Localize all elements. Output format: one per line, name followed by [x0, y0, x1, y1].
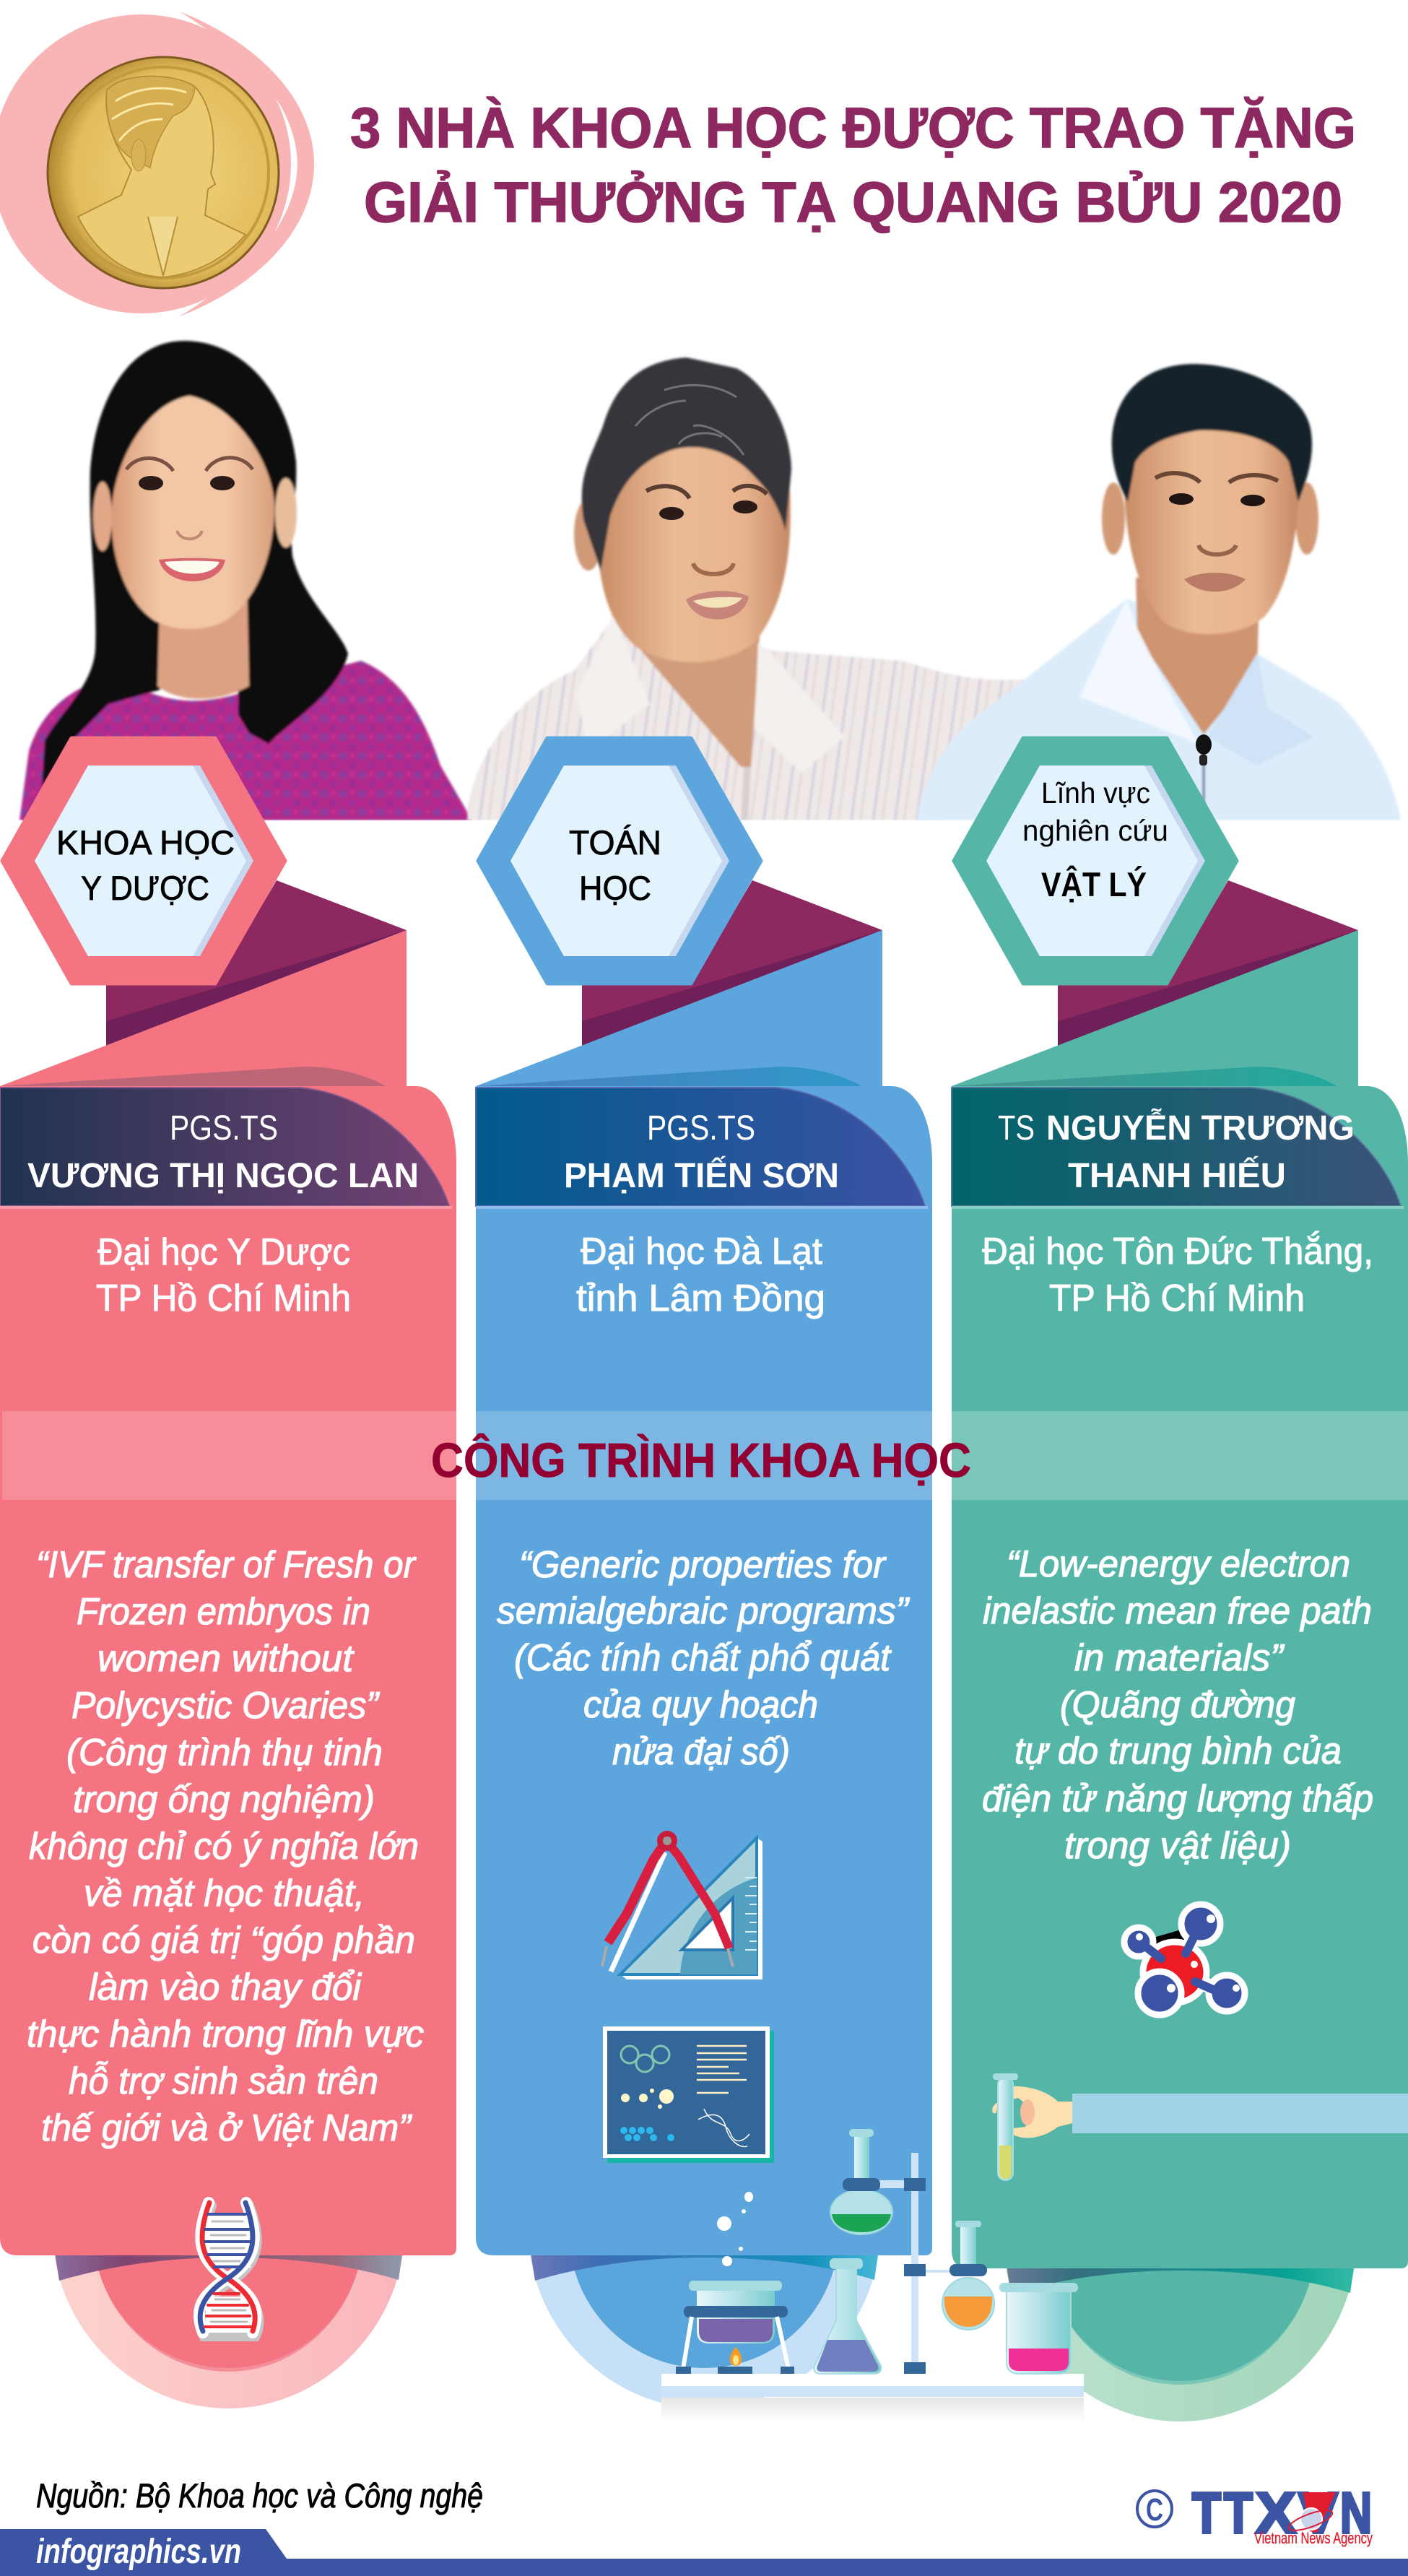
panel: Vật lý: THANH HIẾU [1068, 1156, 1286, 1195]
green flask [830, 2129, 892, 2234]
award medal [0, 12, 314, 316]
title: 3 NHÀ KHOA HỌC ĐƯỢC TRAO TẶNG [350, 95, 1356, 160]
pink beaker [999, 2283, 1078, 2374]
panel: Vật lý [952, 880, 1408, 2268]
burner beaker [676, 2281, 794, 2374]
research description [27, 1544, 424, 2149]
university: tỉnh Lâm Đồng [576, 1278, 825, 1319]
hexagon: Toán học: TOÁN [569, 823, 661, 862]
TTXVN logo: T [1224, 2481, 1253, 2545]
icon: hand holding test tube [992, 2073, 1408, 2180]
hexagon: Khoa học Y dược: Y DƯỢC [81, 869, 209, 907]
icon: microphone [1196, 734, 1212, 766]
conical flask [814, 2258, 881, 2374]
TTXVN logo [1137, 2481, 1373, 2547]
research description [982, 1543, 1373, 1867]
hexagon: Khoa học Y dược [2, 738, 285, 984]
research description: không chỉ có ý nghĩa lớn [29, 1826, 419, 1868]
research description [497, 1544, 911, 1773]
retort stand [879, 2153, 951, 2374]
lower semi-circles [53, 2239, 1356, 2421]
semi-circle: pink [53, 2239, 404, 2408]
bench [661, 2398, 1084, 2422]
TTXVN logo: C [1146, 2492, 1163, 2528]
university: TP Hồ Chí Minh [96, 1278, 351, 1319]
university: TP Hồ Chí Minh [1049, 1278, 1305, 1319]
research description: hỗ trợ sinh sản trên [69, 2060, 378, 2102]
research description: trong vật liệu) [1064, 1825, 1291, 1867]
research description: Polycystic Ovaries” [71, 1685, 381, 1727]
research description: (Các tính chất phổ quát [514, 1637, 892, 1679]
name band [952, 1088, 1401, 1206]
icon: molecule [1124, 1904, 1245, 2015]
panel: Vật lý: TS [998, 1109, 1035, 1148]
semi-circle: green [1004, 2252, 1356, 2421]
panel: Vật lý: NGUYỄN TRƯƠNG [1046, 1109, 1355, 1148]
research description: còn có giá trị “góp phần [32, 1920, 415, 1961]
section band: Công trình khoa học [2, 1411, 1408, 1500]
panel: Toán học: PHẠM TIẾN SƠN [564, 1156, 839, 1195]
research description: thế giới và ở Việt Nam” [41, 2107, 413, 2149]
facial features [1155, 473, 1278, 591]
research description: của quy hoạch [583, 1684, 818, 1726]
hexagon: Vật lý: VẬT LÝ [1041, 865, 1147, 903]
semi-circle: blue [529, 2239, 880, 2408]
TTXVN logo: T [1192, 2481, 1221, 2545]
name band [0, 1088, 449, 1206]
university: Đại học Đà Lạt [581, 1231, 823, 1272]
panel: Toán học [476, 880, 932, 2255]
icon: DNA helix [199, 2203, 258, 2336]
portraits [19, 341, 1401, 820]
panel: Khoa học Y dược [0, 880, 456, 2255]
portrait: Vương Thị Ngọc Lan [19, 341, 472, 820]
copyright ring [1137, 2491, 1172, 2527]
maroon ribbon [1058, 880, 1358, 1044]
pink crescent [180, 12, 314, 316]
panel: Toán học: PGS.TS [647, 1109, 755, 1148]
column card [476, 930, 932, 2255]
research description: về mặt học thuật, [84, 1873, 365, 1914]
research description: inelastic mean free path [983, 1590, 1372, 1632]
university: Đại học Y Dược [97, 1231, 350, 1273]
gold medal [48, 57, 279, 288]
research description: (Công trình thụ tinh [66, 1732, 383, 1774]
title [350, 95, 1356, 234]
icon: laboratory equipment [661, 2129, 1084, 2422]
hair highlights [635, 385, 744, 455]
maroon ribbon [582, 880, 882, 1044]
research description: nửa đại số) [612, 1731, 790, 1773]
TTXVN logo: X [1256, 2481, 1296, 2545]
facial features [126, 458, 253, 581]
hexagon: Toán học: HỌC [579, 869, 651, 907]
panel: Khoa học Y dược: VƯƠNG THỊ NGỌC LAN [27, 1157, 419, 1195]
hexagon: Khoa học Y dược: KHOA HỌC [56, 823, 235, 862]
portrait: Phạm Tiến Sơn [467, 357, 1025, 820]
research description: women without [97, 1638, 355, 1680]
research description: “IVF transfer of Fresh or [36, 1544, 417, 1586]
section band: Công trình khoa học: CÔNG TRÌNH KHOA HỌC [431, 1434, 971, 1488]
column card [952, 930, 1408, 2268]
university: Đại học Tôn Đức Thắng, [982, 1231, 1373, 1272]
hexagon: Vật lý: Lĩnh vực [1041, 776, 1150, 810]
portrait: Nguyễn Trương Thanh Hiếu [916, 364, 1401, 820]
hexagon: Toán học [478, 738, 761, 984]
university [982, 1231, 1373, 1319]
research description: “Low-energy electron [1007, 1543, 1350, 1585]
hexagon: Vật lý: nghiên cứu [1022, 814, 1168, 847]
footer bar: infographics.vn [36, 2533, 241, 2571]
TTXVN logo: N [1340, 2481, 1372, 2545]
title: GIẢI THƯỞNG TẠ QUANG BỬU 2020 [364, 170, 1342, 234]
research description: làm vào thay đổi [89, 1966, 362, 2008]
research description: Frozen embryos in [77, 1591, 370, 1633]
bubbles [717, 2192, 753, 2266]
research description: trong ống nghiệm) [73, 1779, 375, 1821]
research description: tự do trung bình của [1014, 1730, 1342, 1772]
source: Nguồn: Bộ Khoa học và Công nghệ [36, 2476, 483, 2515]
research description: in materials” [1074, 1637, 1285, 1679]
university [96, 1231, 351, 1319]
orange flask [942, 2221, 994, 2330]
research description: điện tử năng lượng thấp [982, 1778, 1373, 1820]
name band [476, 1088, 925, 1206]
icon: science chart board [603, 2026, 774, 2163]
research description: semialgebraic programs” [497, 1590, 911, 1632]
TTXVN logo: V [1298, 2481, 1338, 2545]
pink circle backdrop [0, 14, 291, 313]
panel: Khoa học Y dược: PGS.TS [170, 1109, 278, 1148]
footer bar [0, 2529, 1408, 2576]
facial features [646, 486, 767, 620]
university [576, 1231, 825, 1319]
maroon ribbon [106, 880, 407, 1044]
column card [0, 930, 456, 2255]
research description: thực hành trong lĩnh vực [27, 2013, 424, 2055]
research description: “Generic properties for [519, 1544, 887, 1586]
hexagon: Vật lý [954, 738, 1237, 984]
icon: compass and set square [602, 1831, 762, 1979]
research description: (Quãng đường [1060, 1684, 1295, 1726]
